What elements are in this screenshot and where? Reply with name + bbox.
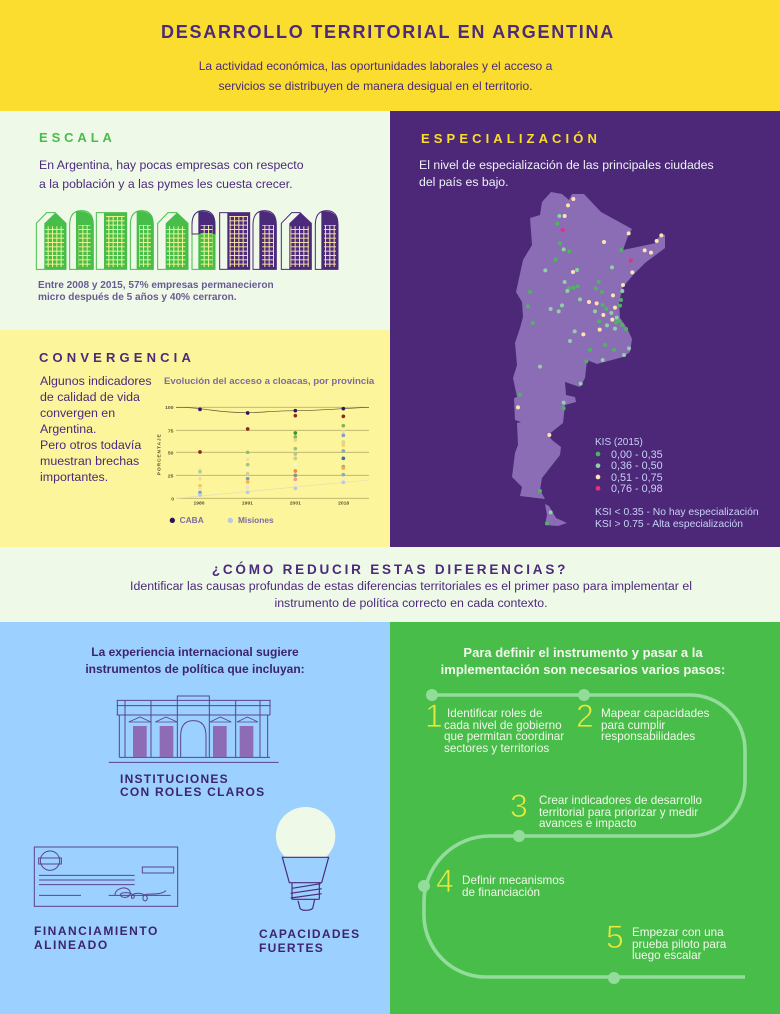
number 4: 4: [436, 863, 454, 899]
text 3: territorial para priorizar y medir: [539, 806, 698, 819]
text: especializacion: del país es bajo.: [419, 175, 509, 189]
note: escala: micro después de 5 años y 40% cerraron.: [38, 292, 237, 303]
text: convergencia: de calidad de vida: [40, 390, 140, 404]
heading: convergencia: CONVERGENCIA: [39, 350, 195, 365]
text 4: [462, 874, 565, 899]
text 1: cada nivel de gobierno: [444, 718, 562, 732]
text 5: prueba piloto para: [632, 938, 726, 951]
text 4: de financiación: [462, 886, 540, 899]
KSI note: [595, 507, 759, 530]
number 2: 2: [576, 698, 594, 734]
header panel: [0, 0, 780, 111]
heading: instrumentos: La experiencia internacional sugiere: [91, 645, 299, 659]
step 5: [606, 919, 726, 962]
text: escala: En Argentina, hay pocas empresas con respecto: [39, 158, 304, 172]
text 3: avances e impacto: [539, 817, 636, 830]
label: financiamiento: [34, 924, 159, 952]
label: financiamiento: ALINEADO: [34, 938, 109, 952]
heading: pasos: implementación son necesarios varios pasos:: [441, 662, 725, 677]
map: Argentina: [512, 192, 665, 526]
text 2: Mapear capacidades: [601, 707, 710, 720]
chart: acceso a cloacas: 75: [168, 428, 174, 434]
legend values: 0,51 - 0,75: [611, 472, 663, 484]
label: capacidades: [259, 927, 360, 955]
chart: acceso a cloacas: 1980: [193, 501, 205, 507]
text: convergencia: Algunos indicadores: [40, 374, 152, 388]
step 3: [510, 788, 702, 830]
step 4: [436, 863, 565, 899]
band: como reducir: [0, 547, 780, 622]
text 3: [539, 794, 702, 830]
chart: acceso a cloacas: 0: [171, 496, 174, 502]
text: convergencia: Pero otros todavía: [40, 438, 141, 452]
subtitle: [199, 59, 552, 93]
number 3: 3: [510, 788, 528, 824]
note: escala: [38, 280, 274, 303]
heading: como reducir: ¿CÓMO REDUCIR ESTAS DIFERENCIAS?: [212, 562, 568, 577]
text 2: responsabilidades: [601, 730, 695, 743]
text 5: Empezar con una: [632, 926, 724, 939]
panel: especializacion: [390, 111, 780, 547]
text 1: [444, 707, 564, 754]
text: convergencia: convergen en: [40, 406, 115, 420]
legend title: KIS (2015): [595, 437, 643, 448]
number 1: 1: [425, 698, 443, 734]
step 1: [425, 698, 564, 754]
text: especializacion: El nivel de especialización de las principales ciudades: [419, 158, 714, 172]
number 5: 5: [606, 919, 624, 955]
legend values: 0,00 - 0,35: [611, 449, 663, 461]
chart: acceso a cloacas: 2001: [290, 501, 301, 507]
legend values: [611, 449, 663, 495]
text: como reducir: Identificar las causas profundas de estas diferencias territoriales es el primer paso para implementar el: [130, 579, 692, 593]
path: pasos: [418, 689, 747, 984]
text 5: luego escalar: [632, 949, 702, 962]
panel: convergencia: [0, 330, 390, 547]
chart: acceso a cloacas: 1991: [242, 501, 253, 507]
panel: instrumentos: [0, 622, 390, 1014]
text 4: Definir mecanismos: [462, 874, 565, 887]
title: DESARROLLO TERRITORIAL EN ARGENTINA: [161, 22, 615, 42]
icon: bombilla: [276, 807, 336, 911]
note: escala: Entre 2008 y 2015, 57% empresas permanecieron: [38, 280, 274, 291]
chart: acceso a cloacas: 2018: [338, 501, 349, 507]
chart: acceso a cloacas: Misiones: [238, 515, 274, 525]
panel: escala: [0, 111, 390, 330]
legend values: 0,76 - 0,98: [611, 483, 663, 495]
chart: acceso a cloacas: 100: [165, 405, 174, 411]
heading: escala: ESCALA: [39, 130, 116, 145]
icon row: buildings: [36, 210, 338, 270]
KSI note: KSI < 0.35 - No hay especialización: [595, 507, 759, 518]
text: escala: a la población y a las pymes les cuesta crecer.: [39, 177, 293, 191]
heading: especializacion: ESPECIALIZACIÓN: [421, 131, 601, 146]
chart: acceso a cloacas: 50: [168, 450, 174, 456]
icon: edificio institucional: [108, 696, 279, 763]
text 2: [601, 707, 710, 743]
text 5: [632, 926, 726, 962]
panel: pasos: [390, 622, 780, 1014]
chart: acceso a cloacas: PORCENTAJE: [157, 433, 163, 475]
text 1: Identificar roles de: [447, 707, 542, 720]
text: convergencia: importantes.: [40, 470, 108, 484]
legend values: 0,36 - 0,50: [611, 460, 663, 472]
heading: pasos: Para definir el instrumento y pasar a la: [463, 645, 703, 660]
step 2: [576, 698, 710, 743]
text: convergencia: [40, 374, 152, 484]
chart title: Evolución del acceso a cloacas, por provincia: [164, 376, 374, 387]
text 2: para cumplir: [601, 718, 665, 732]
text: como reducir: [130, 579, 692, 610]
heading: pasos: [441, 645, 725, 677]
label: capacidades: CAPACIDADES: [259, 927, 360, 941]
heading: instrumentos: [85, 645, 305, 676]
text: escala: [39, 158, 304, 191]
label: instituciones: CON ROLES CLAROS: [120, 785, 265, 799]
label: financiamiento: FINANCIAMIENTO: [34, 924, 159, 938]
text: como reducir: instrumento de política correcto en cada contexto.: [274, 596, 548, 610]
icon: cheque: [34, 846, 178, 907]
text: convergencia: Argentina.: [40, 422, 96, 436]
subtitle: servicios se distribuyen de manera desigual en el territorio.: [218, 79, 533, 93]
label: instituciones: INSTITUCIONES: [120, 772, 229, 786]
chart: acceso a cloacas: 25: [168, 473, 174, 479]
subtitle: La actividad económica, las oportunidades laborales y el acceso a: [199, 59, 552, 73]
text 3: Crear indicadores de desarrollo: [539, 794, 702, 807]
label: capacidades: FUERTES: [259, 941, 324, 955]
KSI note: KSI > 0.75 - Alta especialización: [595, 518, 743, 530]
text: convergencia: muestran brechas: [40, 454, 139, 468]
chart: acceso a cloacas: CABA: [180, 515, 204, 525]
label: instituciones: [120, 772, 265, 799]
chart: acceso a cloacas: [157, 405, 369, 525]
legend: KIS: [595, 437, 759, 530]
text: especializacion: [419, 158, 714, 189]
text 1: sectores y territorios: [444, 742, 549, 754]
text 1: que permitan coordinar: [444, 730, 564, 743]
heading: instrumentos: instrumentos de política que incluyan:: [85, 662, 305, 676]
